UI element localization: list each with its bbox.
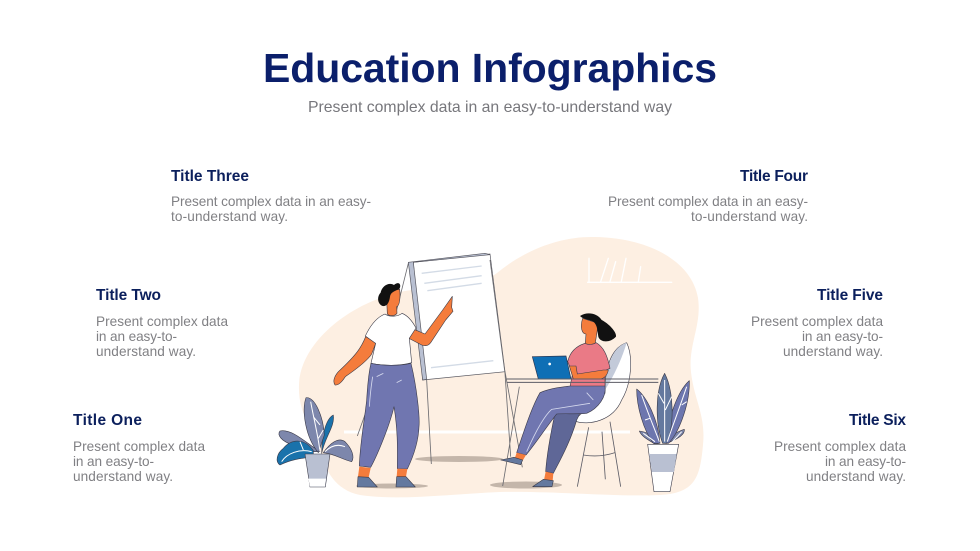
man: shirt — [365, 313, 416, 365]
text block: title two: Title Two — [96, 287, 161, 304]
text block: title five — [751, 287, 883, 359]
text block: title five: Present complex data — [751, 314, 883, 329]
illustration: right plant — [637, 373, 689, 492]
plant: leaves — [277, 398, 353, 465]
laptop — [532, 356, 571, 379]
text block: title five: in an easy-to- — [802, 329, 883, 344]
desk: legs — [490, 260, 519, 486]
text block: title four — [608, 168, 808, 224]
text block: title three: Title Three — [171, 168, 249, 185]
chair: seat back — [573, 343, 631, 423]
plant: pot — [305, 454, 330, 487]
plant: pot — [648, 444, 679, 492]
text block: title five: understand way. — [783, 344, 883, 359]
man: left arm — [334, 337, 376, 385]
plant: leaf veins — [282, 402, 345, 462]
illustration: standing man — [334, 283, 453, 487]
desk — [507, 379, 658, 382]
illustration: seated woman with desk — [490, 260, 658, 487]
text block: title four: Title Four — [740, 168, 808, 185]
woman: hair — [580, 313, 616, 341]
woman: neck and face — [581, 318, 598, 347]
plant: leaf veins — [642, 380, 687, 443]
illustration: floor line — [344, 430, 630, 434]
man: right arm — [409, 296, 453, 346]
text block: title three: Present complex data in an easy- — [171, 194, 371, 209]
woman: forearm — [569, 366, 608, 379]
illustration: floor shadows — [356, 456, 562, 488]
text block: title one: understand way. — [73, 469, 173, 484]
illustration: wall shelf — [588, 258, 672, 282]
text block: title six: understand way. — [806, 469, 906, 484]
woman: front leg — [517, 386, 605, 455]
text block: title four: Present complex data in an easy- — [608, 194, 808, 209]
woman: back leg — [546, 407, 583, 473]
man: trousers — [359, 363, 419, 469]
text block: title one: Title One — [73, 412, 142, 429]
plant: leaves — [637, 373, 689, 444]
text block: title two: Present complex data — [96, 314, 228, 329]
subtitle: Present complex data in an easy-to-understand way — [308, 99, 672, 116]
text block: title one: Present complex data — [73, 439, 205, 454]
text block: title six: Present complex data — [774, 439, 906, 454]
illustration: flipchart — [396, 253, 522, 467]
chair: legs — [577, 422, 621, 487]
text block: title six: Title Six — [849, 412, 906, 429]
text block: title three — [171, 168, 371, 224]
laptop: logo — [548, 363, 551, 365]
title: Education Infographics — [263, 45, 717, 91]
woman: ankles — [515, 453, 553, 481]
illustration: left plant — [277, 398, 353, 487]
text block: title two: in an easy-to- — [96, 329, 177, 344]
text block: title three: to-understand way. — [171, 209, 288, 224]
text block: title one — [73, 412, 205, 484]
woman: shoes — [501, 457, 553, 487]
man: ankles — [358, 467, 407, 477]
text block: title six: in an easy-to- — [825, 454, 906, 469]
woman: shirt — [568, 343, 610, 387]
text block: title five: Title Five — [817, 287, 883, 304]
text block: title one: in an easy-to- — [73, 454, 154, 469]
text block: title two: understand way. — [96, 344, 196, 359]
text block: title four: to-understand way. — [691, 209, 808, 224]
illustration: background blob — [299, 237, 703, 497]
text block: title six — [774, 412, 906, 484]
text block: title two — [96, 287, 228, 359]
man: shoes — [357, 477, 415, 487]
man: neck and face — [387, 289, 400, 316]
man: hair — [378, 283, 400, 306]
